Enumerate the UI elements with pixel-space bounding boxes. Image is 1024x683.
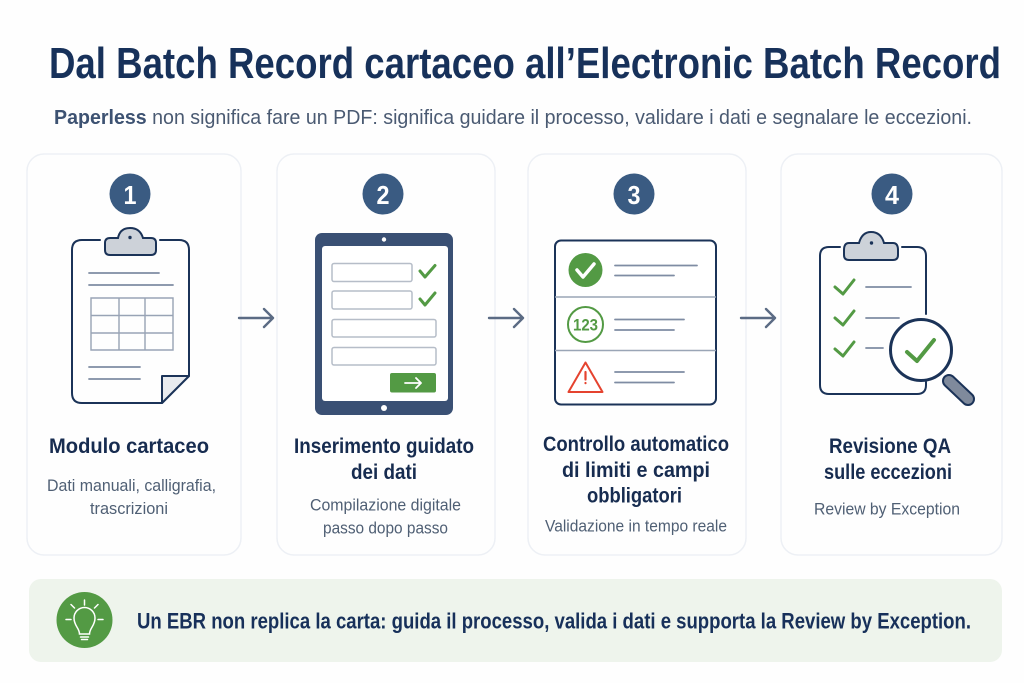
arrow 1 to 2: [239, 309, 273, 327]
callout banner: [29, 579, 1002, 662]
heading: sulle eccezioni: [824, 460, 952, 484]
description: Dati manuali, calligrafia,: [47, 476, 216, 495]
badge 1: 1: [124, 180, 136, 210]
heading: di limiti e campi: [562, 458, 710, 482]
icon: validation list: 123: [573, 316, 598, 334]
description: passo dopo passo: [323, 518, 448, 538]
icon: tablet form: [315, 233, 453, 415]
description: Review by Exception: [814, 500, 960, 518]
badge 3: [614, 174, 654, 214]
panel: step 1: [27, 154, 241, 555]
panel: step 3: [528, 154, 746, 555]
badge 4: 4: [885, 180, 900, 210]
description: Compilazione digitale: [310, 496, 461, 514]
heading: Modulo cartaceo: [49, 434, 209, 458]
icon: light bulb: [56, 592, 112, 648]
badge 2: 2: [376, 180, 390, 210]
heading: Inserimento guidato: [294, 434, 474, 458]
description: Validazione in tempo reale: [545, 516, 727, 536]
description: [310, 496, 461, 538]
panel: step 4: [781, 154, 1002, 555]
heading: Controllo automatico: [543, 432, 729, 456]
icon: validation list: [555, 240, 716, 404]
icon: paper clipboard: [72, 228, 189, 403]
heading: [824, 434, 952, 484]
arrow 3 to 4: [741, 309, 775, 327]
subtitle: Paperless non significa fare un PDF: significa guidare il processo, validare i dati e segnalare le eccezioni.: [54, 107, 972, 129]
badge 2: [362, 174, 404, 214]
heading: obbligatori: [587, 484, 682, 508]
badge 1: [110, 174, 150, 214]
panel: step 2: [277, 154, 495, 555]
description: [47, 476, 216, 518]
heading: dei dati: [351, 460, 417, 484]
badge 4: [872, 174, 912, 214]
icon: QA checklist with magnifier: [820, 232, 968, 399]
heading: [543, 432, 729, 508]
badge 3: 3: [628, 180, 640, 210]
description: trascrizioni: [90, 499, 168, 518]
arrow 2 to 3: [489, 309, 523, 327]
heading: [294, 434, 474, 484]
heading: Revisione QA: [829, 434, 951, 458]
